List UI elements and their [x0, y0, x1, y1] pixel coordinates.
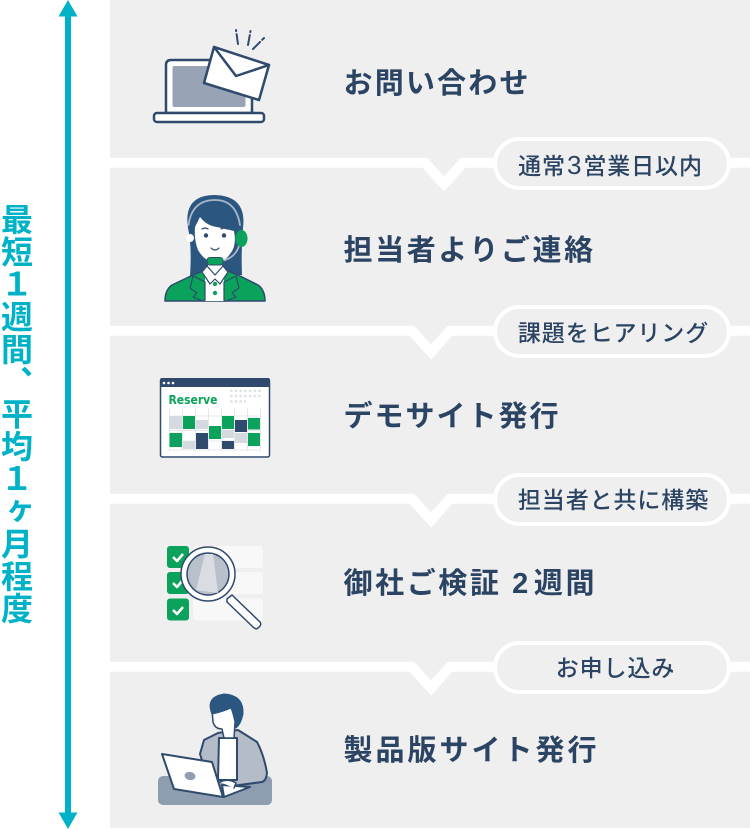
icon: laptop with envelope: [154, 30, 269, 122]
step 5 label: 製品版サイト発行: [344, 735, 600, 767]
step 3 label: デモサイト発行: [344, 401, 561, 433]
pill text 4: お申し込み: [556, 655, 675, 681]
icon: person at laptop: [158, 694, 272, 805]
step 4 label: 御社ご検証 2週間: [344, 568, 597, 600]
arrow: duration: [58, 0, 78, 829]
icon: reservation calendar: [160, 378, 270, 457]
icon: operator with headset: [165, 195, 265, 301]
pill text 3: 担当者と共に構築: [518, 487, 709, 513]
separator 4: [110, 643, 750, 692]
step 1 label: お問い合わせ: [344, 68, 531, 100]
separator 1: [110, 139, 750, 188]
separator 3: [110, 475, 750, 524]
pill text 2: 課題をヒアリング: [518, 320, 709, 346]
icon: reservation calendar: Reserve: [168, 392, 218, 407]
icon: checklist with magnifier: [167, 546, 263, 629]
pill text 1: 通常3営業日以内: [518, 150, 703, 180]
step 2 label: 担当者よりご連絡: [344, 235, 596, 267]
separator 2: [110, 307, 750, 356]
